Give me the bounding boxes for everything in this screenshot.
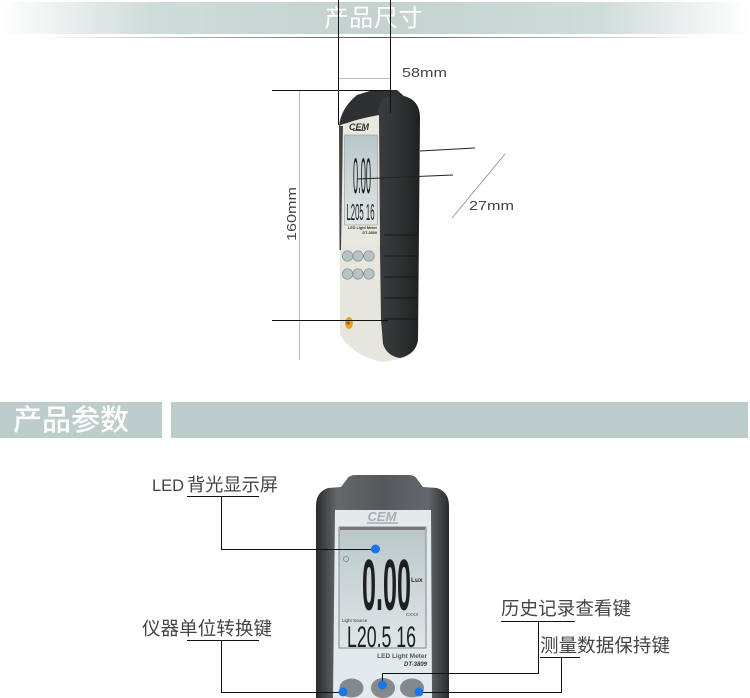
device photo: side view: [339, 90, 420, 362]
dimension: depth 27mm: 27mm: [469, 198, 514, 213]
title: product dimensions: 产品尺寸: [324, 5, 422, 32]
logo: CEM: CEM: [368, 509, 398, 524]
section heading: product parameters: 产品参数: [13, 404, 129, 437]
device photo: front view: DT-3809: [404, 662, 428, 668]
device photo: side view: L205 16: [346, 199, 374, 225]
header band: product dimensions: [0, 2, 750, 38]
dimension: height 160mm: 160mm: [284, 187, 299, 241]
button rows: [342, 251, 374, 279]
light source label: Light Source: [342, 618, 368, 623]
logo: CEM: CEM: [349, 122, 370, 132]
dimension: width 58mm: [338, 0, 447, 125]
callout: unit switch key: [142, 618, 348, 696]
callout: data hold key: [414, 635, 670, 696]
callout: unit switch key: 仪器单位转换键: [142, 618, 272, 639]
device photo: side view: 0.00: [353, 148, 371, 204]
callout: history key: [378, 598, 631, 690]
dimension: height 160mm: [272, 90, 390, 360]
sensor light: [345, 317, 353, 329]
callout: backlit display: [152, 475, 380, 554]
dimension: depth 27mm: [357, 148, 514, 218]
power icon: [344, 556, 348, 562]
ridges on the grip: [384, 235, 418, 319]
LCD screen: [339, 527, 426, 648]
callout: data hold key: 测量数据保持键: [540, 635, 670, 656]
model label: LED Light Meter: [348, 226, 378, 230]
section heading: product parameters: [0, 402, 748, 438]
faceplate: [342, 115, 380, 247]
device photo: front view: [316, 475, 449, 698]
small LCD: [344, 135, 378, 225]
dimension: width 58mm: 58mm: [402, 65, 447, 80]
callout: history key: 历史记录查看键: [501, 598, 631, 619]
CXXX label: CXXX: [406, 612, 418, 617]
callout: backlit display: 背光显示屏: [187, 475, 278, 495]
Lux unit: Lux: [411, 577, 423, 584]
clock reading: L20.5 16: [347, 621, 416, 654]
buttons: [340, 678, 424, 698]
model label: LED Light Meter: [377, 653, 427, 660]
callout: backlit display: LED: [152, 477, 184, 495]
device photo: front view: 0.00: [362, 546, 411, 626]
device photo: side view: DT-3809: [362, 231, 377, 235]
